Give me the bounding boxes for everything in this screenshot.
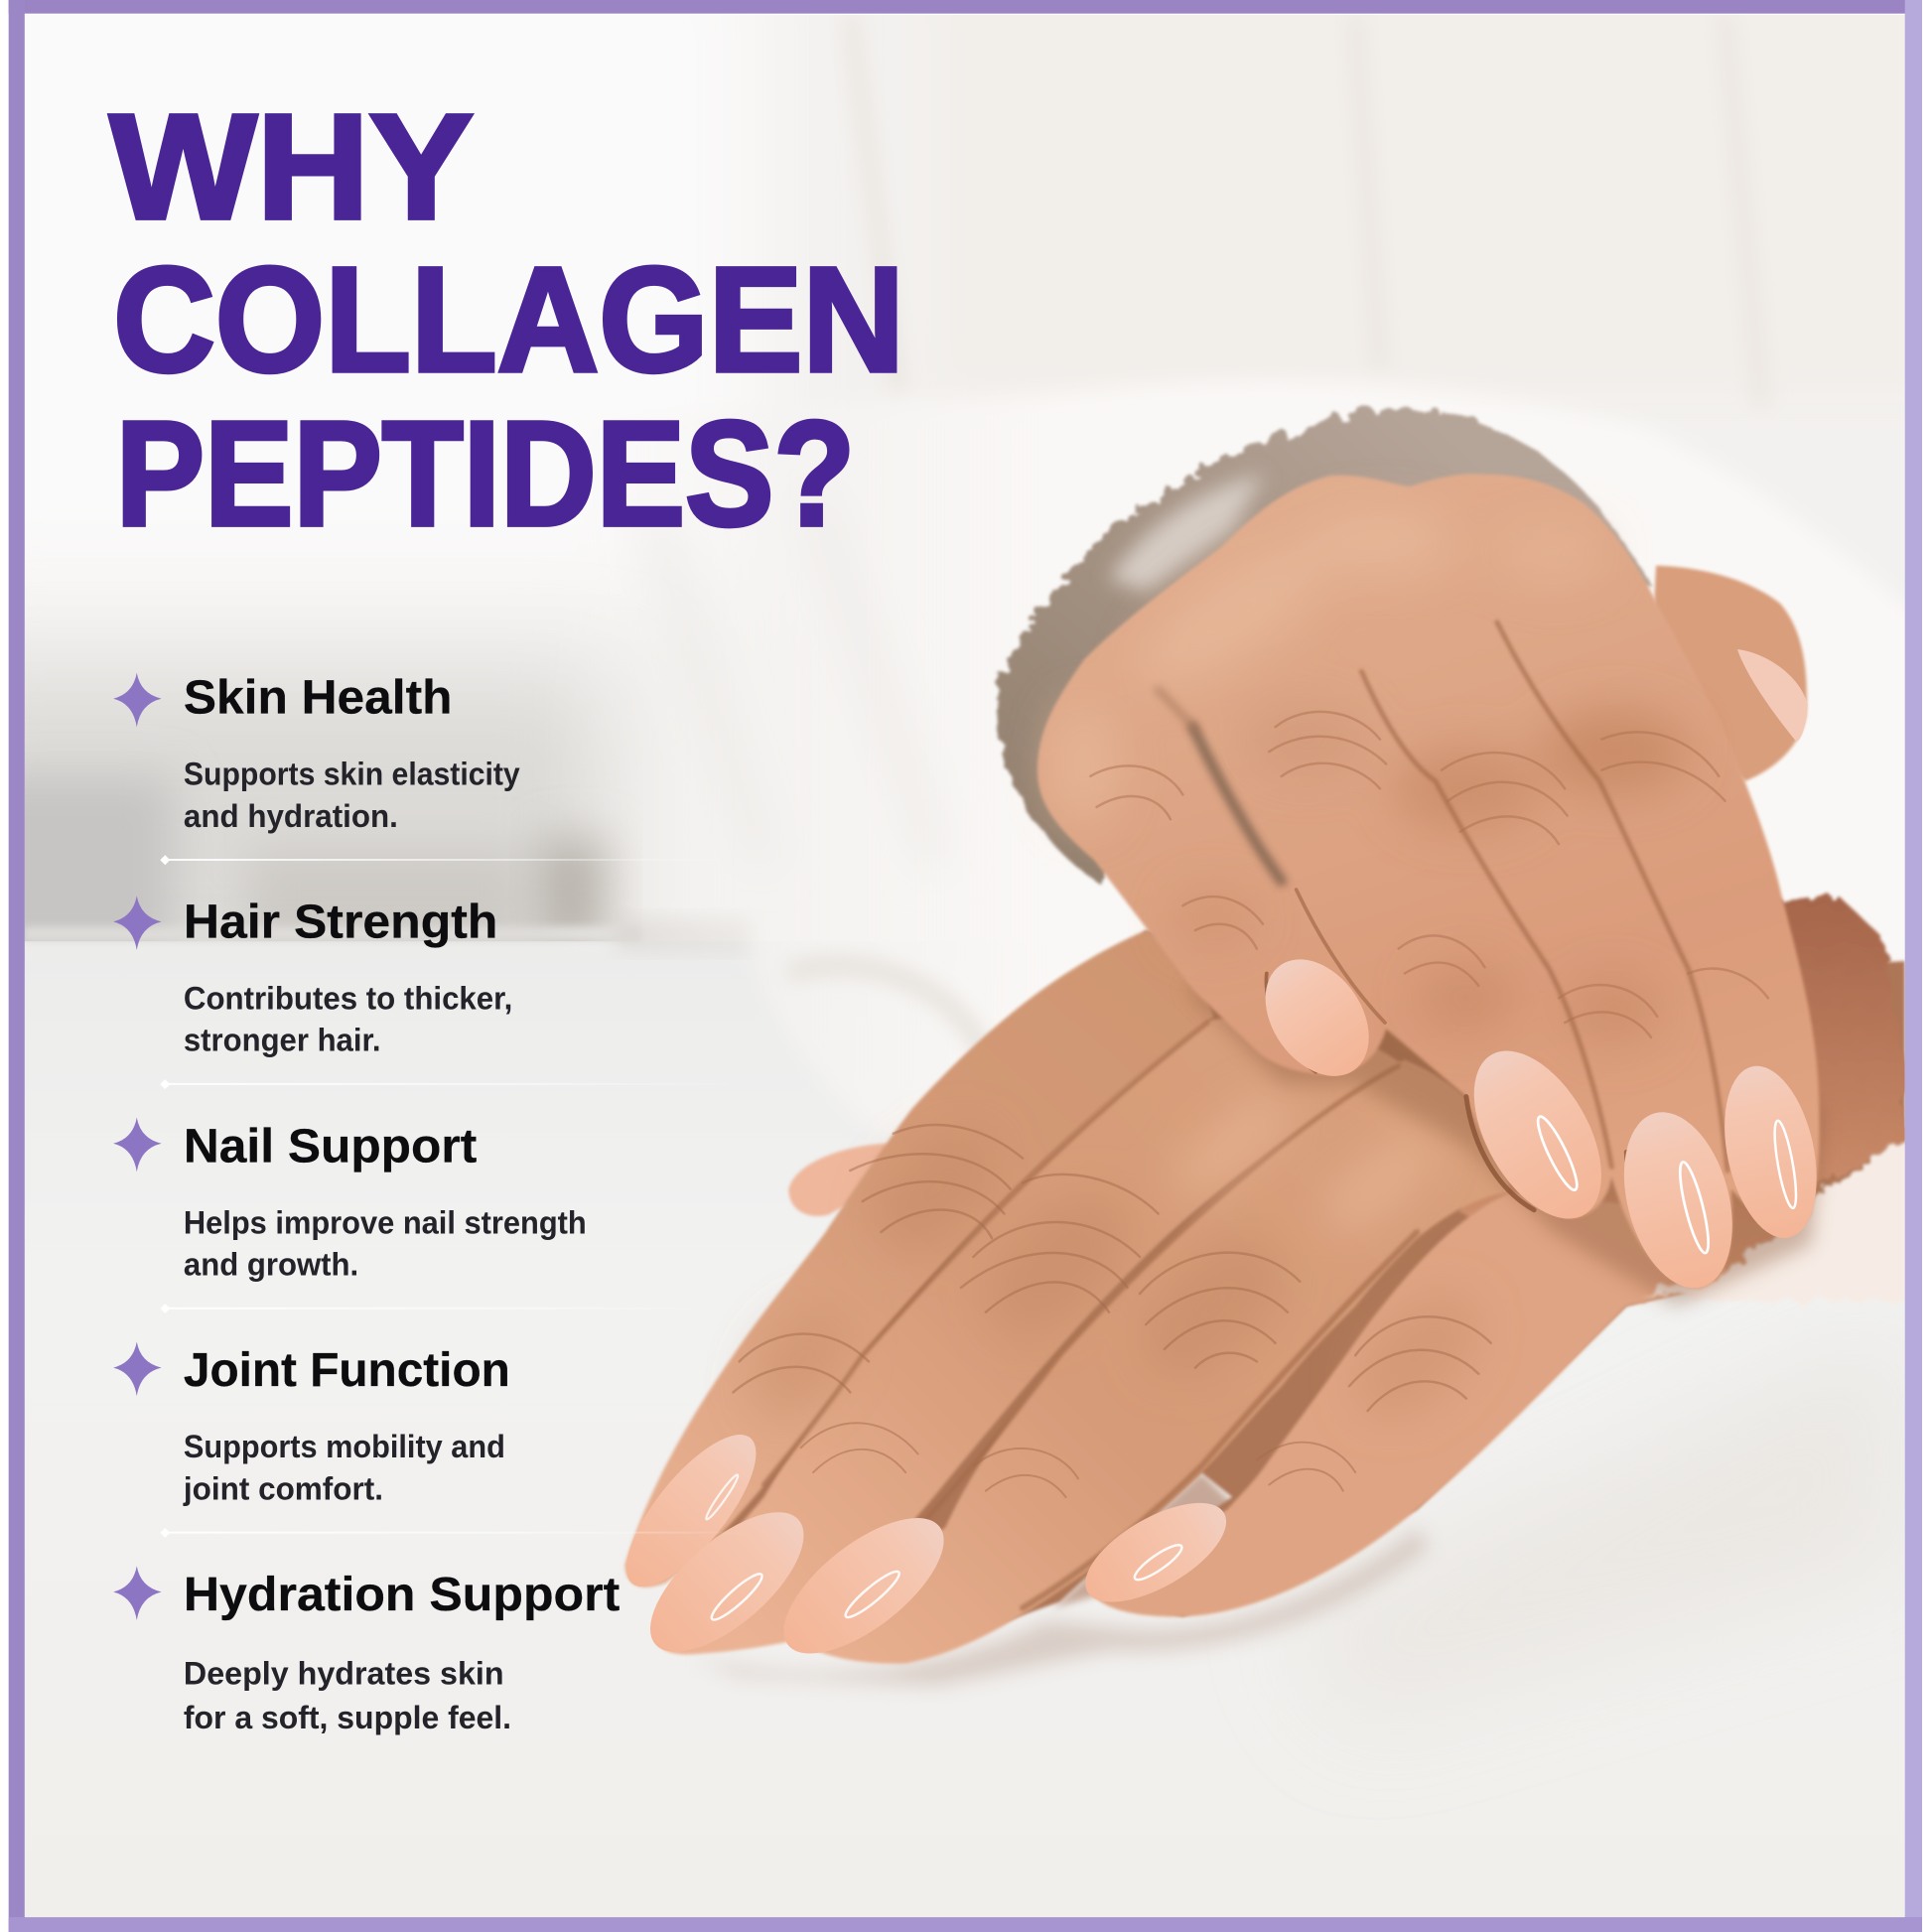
lower cuff bbox=[1639, 1134, 1922, 1302]
finger separations bbox=[763, 1023, 1417, 1608]
knuckle creases bbox=[733, 1125, 1491, 1497]
upper hand nails bbox=[1244, 649, 1831, 1300]
description: nail support: Helps improve nail strength bbox=[184, 1204, 587, 1240]
heading: hydration support: Hydration Support bbox=[184, 1568, 620, 1621]
description: skin health: and hydration. bbox=[184, 798, 398, 834]
heading: skin health: Skin Health bbox=[184, 671, 452, 725]
sleeve inner shadow bbox=[993, 409, 1657, 881]
shadow between fingertips bbox=[1053, 1472, 1238, 1608]
icon: sparkle star bbox=[113, 673, 162, 727]
thumb nail bbox=[1737, 649, 1808, 742]
heading: nail support: Nail Support bbox=[184, 1119, 477, 1173]
upper hand light and shade bbox=[1052, 507, 1688, 1047]
description: hydration support: for a soft, supple feel. bbox=[184, 1700, 511, 1735]
lower hand bbox=[606, 896, 1905, 1686]
benefit: skin health bbox=[113, 671, 520, 834]
finger separations bbox=[1159, 622, 1727, 1284]
thumb bbox=[1651, 566, 1807, 781]
icon: sparkle star bbox=[113, 1342, 162, 1396]
divider line bbox=[160, 855, 756, 865]
title: PEPTIDES? bbox=[116, 390, 855, 557]
fourth finger bbox=[1090, 1192, 1737, 1616]
peeking nail of hidden thumb bbox=[788, 1144, 888, 1216]
upper hand knuckle creases bbox=[1090, 712, 1768, 1037]
title: COLLAGEN bbox=[113, 236, 904, 403]
divider line bbox=[160, 1304, 756, 1313]
wrist skin bbox=[1453, 896, 1905, 1307]
nail 1 bbox=[606, 1416, 777, 1605]
hand back and fingers bbox=[1037, 474, 1820, 1289]
divider line bbox=[160, 1079, 756, 1089]
second finger bbox=[653, 1017, 1405, 1655]
benefit: nail support bbox=[113, 1118, 587, 1283]
hand base with finger gaps bbox=[690, 930, 1905, 1657]
nail 2 bbox=[627, 1488, 826, 1676]
description: joint function: joint comfort. bbox=[183, 1470, 383, 1506]
middle nail bbox=[1448, 1030, 1627, 1240]
lower hand nails bbox=[606, 1416, 1241, 1678]
ring nail bbox=[1606, 1100, 1750, 1300]
benefit: joint function bbox=[113, 1342, 510, 1506]
title bbox=[109, 83, 904, 557]
index nail bbox=[1244, 940, 1390, 1096]
description: hair strength: Contributes to thicker, bbox=[184, 980, 512, 1016]
description: nail support: and growth. bbox=[184, 1247, 358, 1283]
benefit: hydration support bbox=[113, 1566, 620, 1735]
benefit: hair strength bbox=[113, 895, 512, 1058]
upper hand bbox=[1037, 474, 1831, 1307]
knuckle light and shade bbox=[767, 1107, 1459, 1400]
icon: sparkle star bbox=[113, 1118, 162, 1172]
heading: joint function: Joint Function bbox=[184, 1343, 510, 1397]
third finger bbox=[788, 1059, 1509, 1664]
title: WHY bbox=[109, 83, 474, 250]
upper hand cast shadow bbox=[1182, 986, 1824, 1307]
shadow under the fingers bbox=[690, 1528, 1430, 1686]
description: skin health: Supports skin elasticity bbox=[184, 757, 520, 792]
nail 4 bbox=[1070, 1483, 1241, 1622]
description: hair strength: stronger hair. bbox=[184, 1023, 380, 1058]
pinky nail bbox=[1711, 1057, 1831, 1247]
icon: sparkle star bbox=[113, 896, 162, 950]
description: joint function: Supports mobility and bbox=[184, 1429, 505, 1464]
first finger bbox=[624, 930, 1213, 1587]
description: hydration support: Deeply hydrates skin bbox=[184, 1656, 504, 1692]
heading: hair strength: Hair Strength bbox=[184, 895, 497, 948]
icon: sparkle star bbox=[113, 1566, 162, 1620]
nail 3 bbox=[762, 1493, 965, 1678]
robe sleeve bbox=[584, 390, 1904, 1108]
divider line bbox=[160, 1528, 756, 1538]
